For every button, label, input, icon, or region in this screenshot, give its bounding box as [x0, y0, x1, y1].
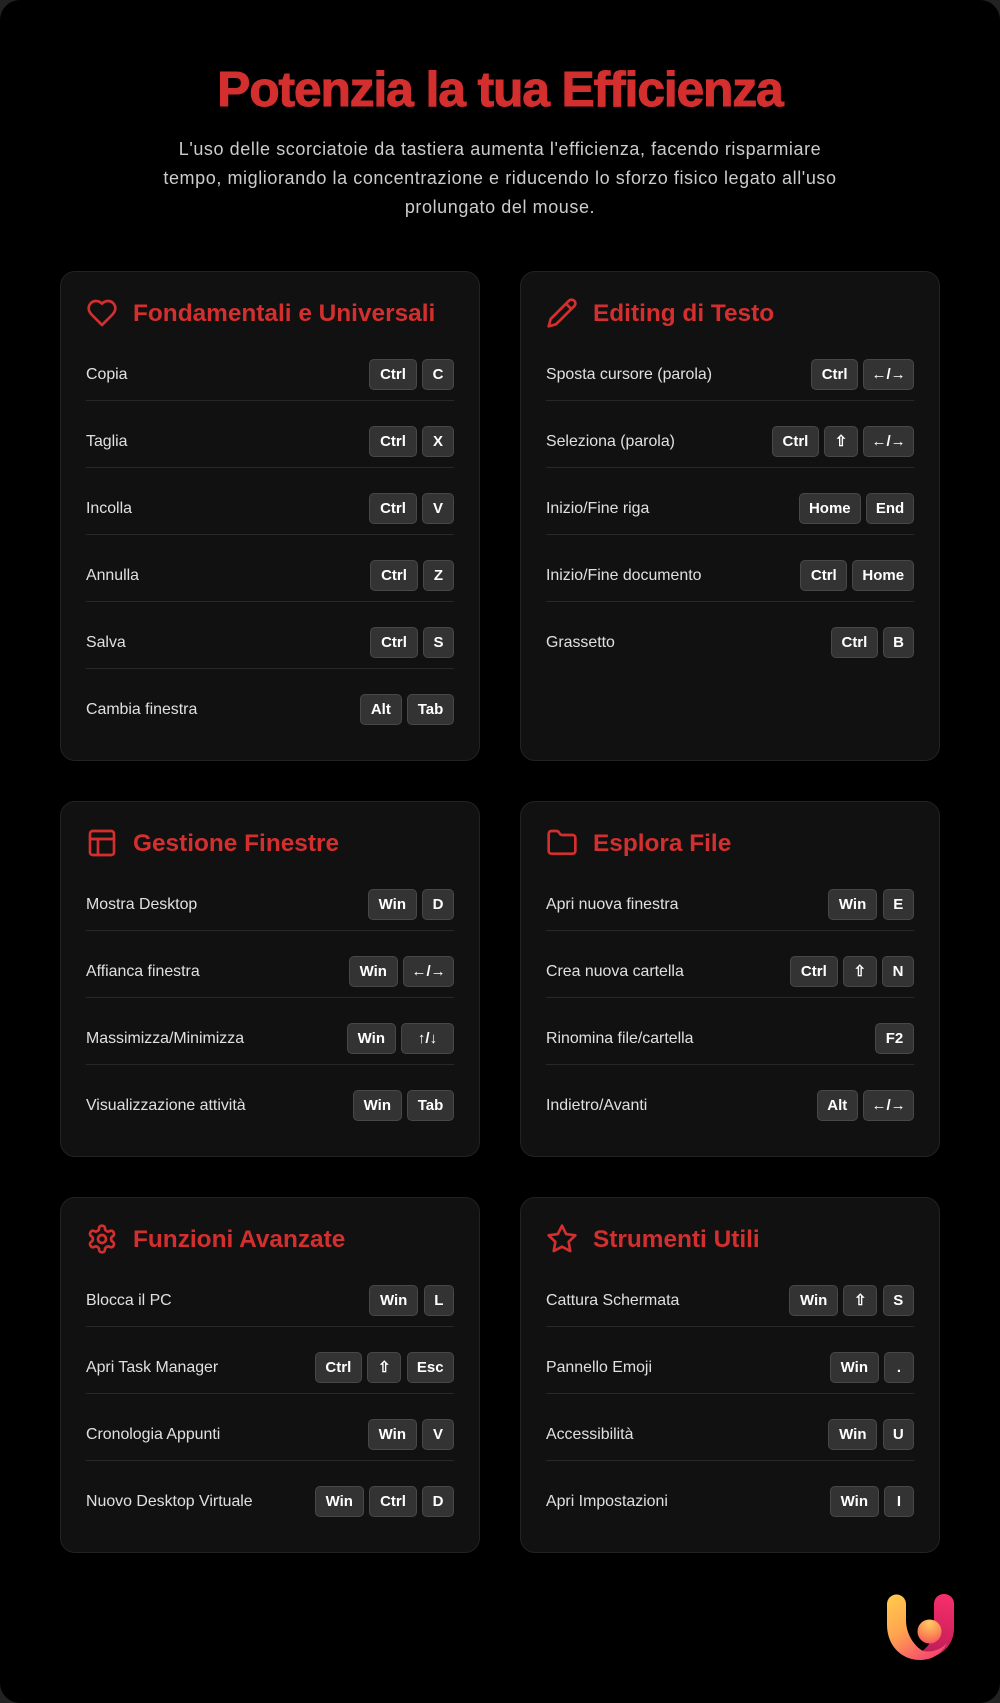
shortcut: Sposta cursore	[546, 359, 914, 401]
shortcut: Cronologia Appunti: Cronologia Appunti	[86, 1426, 220, 1442]
shortcut: Pannello Emoji: .	[897, 1359, 901, 1376]
shortcut: Cambia finestra: Tab	[418, 701, 443, 718]
shortcut: Cattura Schermata: S	[893, 1292, 903, 1309]
shortcut: Massimizza/Minimizza	[86, 1023, 454, 1065]
shortcut: Cattura Schermata: ⇧	[854, 1292, 867, 1309]
shortcut: Apri Task Manager: Apri Task Manager	[86, 1358, 218, 1376]
shortcut: Nuovo Desktop Virtuale: D	[433, 1493, 443, 1510]
shortcut: Nuovo Desktop Virtuale: Ctrl	[380, 1493, 406, 1510]
shortcut: Inizio/Fine documento	[546, 560, 914, 602]
shortcut: Sposta cursore: ←/→	[872, 366, 906, 383]
shortcut: Copia: Copia	[86, 366, 128, 382]
panel heading: Funzioni Avanzate	[133, 1226, 345, 1253]
shortcut: Massimizza/Minimizza: ↑/↓	[418, 1030, 437, 1047]
icon: layout	[88, 830, 116, 856]
shortcut: Accessibilità: Accessibilità	[546, 1426, 633, 1442]
intro paragraph: tempo, migliorando la concentrazione e riducendo lo sforzo fisico legato all'uso	[163, 168, 837, 188]
shortcut: Sposta cursore: Sposta cursore (parola)	[546, 366, 712, 382]
shortcut: Rinomina file/cartella	[546, 1023, 914, 1065]
shortcut: Accessibilità	[546, 1419, 914, 1461]
shortcut: Crea nuova cartella	[546, 956, 914, 998]
shortcut: Annulla	[86, 560, 454, 602]
icon: heart	[87, 300, 117, 326]
icon: star	[547, 1224, 577, 1252]
shortcut: Cronologia Appunti	[86, 1419, 454, 1461]
shortcut: Indietro/Avanti	[546, 1090, 914, 1132]
shortcut: Inizio/Fine riga: End	[876, 500, 904, 517]
shortcut: Sposta cursore: Ctrl	[822, 366, 848, 383]
shortcut: Accessibilità: U	[893, 1426, 904, 1443]
shortcut: Seleziona: ⇧	[835, 433, 847, 450]
shortcut: Inizio/Fine documento: Inizio/Fine documento	[546, 566, 701, 584]
shortcut: Pannello Emoji: Pannello Emoji	[546, 1358, 652, 1376]
shortcut: Visualizzazione attività	[86, 1090, 454, 1132]
panel: Fondamentali e Universali	[60, 271, 480, 761]
shortcut: Apri Task Manager: Ctrl	[325, 1359, 351, 1376]
shortcut: Grassetto	[546, 627, 914, 669]
panel: Editing di Testo	[520, 271, 940, 761]
shortcut: Inizio/Fine documento: Ctrl	[811, 567, 837, 584]
shortcut: Seleziona: Seleziona (parola)	[546, 432, 675, 450]
panel heading: Esplora File	[593, 830, 731, 857]
shortcut: Salva	[86, 627, 454, 669]
shortcut: Rinomina file/cartella: F2	[886, 1030, 903, 1047]
shortcut: Salva: S	[433, 634, 444, 651]
logo ball	[918, 1620, 942, 1644]
shortcut: Annulla: Ctrl	[381, 567, 407, 584]
shortcut: Blocca il PC: Blocca il PC	[86, 1292, 172, 1308]
shortcut: Accessibilità: Win	[839, 1426, 866, 1443]
shortcut: Cronologia Appunti: Win	[379, 1426, 406, 1443]
shortcut: Copia: C	[433, 366, 443, 383]
shortcut: Copia: Ctrl	[380, 366, 406, 383]
shortcut: Taglia	[86, 426, 454, 468]
shortcut: Pannello Emoji	[546, 1352, 914, 1394]
shortcut: Indietro/Avanti: Indietro/Avanti	[546, 1096, 647, 1114]
shortcut: Salva: Salva	[86, 634, 126, 650]
shortcut: Mostra Desktop: D	[433, 896, 443, 913]
shortcut: Nuovo Desktop Virtuale: Nuovo Desktop Virtuale	[86, 1492, 253, 1510]
shortcut: Grassetto: Ctrl	[841, 634, 867, 651]
shortcut: Copia	[86, 359, 454, 401]
shortcut: Cattura Schermata	[546, 1285, 914, 1327]
shortcut: Apri Task Manager: Esc	[417, 1359, 444, 1376]
shortcut: Affianca finestra	[86, 956, 454, 998]
shortcut: Cambia finestra: Cambia finestra	[86, 700, 197, 718]
shortcut: Visualizzazione attività: Visualizzazione attività	[86, 1096, 246, 1114]
shortcut: Affianca finestra: Win	[360, 963, 387, 980]
shortcut: Grassetto: Grassetto	[546, 634, 615, 650]
shortcut: Inizio/Fine riga: Home	[809, 500, 851, 517]
shortcut: Salva: Ctrl	[381, 634, 407, 651]
logo right arm	[922, 1594, 954, 1657]
shortcut: Mostra Desktop	[86, 889, 454, 931]
shortcut: Cambia finestra	[86, 694, 454, 736]
shortcut: Cronologia Appunti: V	[433, 1426, 443, 1443]
panel: Esplora File	[520, 801, 940, 1157]
shortcut: Cattura Schermata: Cattura Schermata	[546, 1292, 679, 1308]
shortcut: Inizio/Fine documento: Home	[862, 567, 904, 584]
shortcut: Blocca il PC: L	[434, 1292, 443, 1309]
panel: Funzioni Avanzate	[60, 1197, 480, 1553]
shortcut: Taglia: Ctrl	[380, 433, 406, 450]
panel heading: Gestione Finestre	[133, 830, 339, 857]
shortcut: Mostra Desktop: Win	[379, 896, 406, 913]
shortcut: Annulla: Annulla	[86, 566, 139, 584]
shortcut: Seleziona: ←/→	[872, 433, 906, 450]
shortcut: Incolla: Ctrl	[380, 500, 406, 517]
shortcut: Apri Impostazioni: Apri Impostazioni	[546, 1492, 668, 1510]
icon: brand logo	[887, 1594, 954, 1660]
shortcut: Incolla: V	[433, 500, 443, 517]
shortcut: Apri Task Manager	[86, 1352, 454, 1394]
shortcut: Inizio/Fine riga: Inizio/Fine riga	[546, 500, 649, 516]
icon: pencil	[547, 298, 577, 328]
panel: Gestione Finestre	[60, 801, 480, 1157]
shortcut: Incolla	[86, 493, 454, 535]
panel: Strumenti Utili	[520, 1197, 940, 1553]
shortcut: Cattura Schermata: Win	[800, 1292, 827, 1309]
shortcut: Crea nuova cartella: Ctrl	[801, 963, 827, 980]
shortcut: Taglia: Taglia	[86, 432, 128, 450]
shortcut: Nuovo Desktop Virtuale: Win	[326, 1493, 353, 1510]
shortcut: Apri nuova finestra: E	[893, 896, 903, 913]
panel heading: Editing di Testo	[593, 300, 774, 327]
shortcut: Apri nuova finestra: Win	[839, 896, 866, 913]
shortcut: Taglia: X	[433, 433, 443, 450]
shortcut: Massimizza/Minimizza: Massimizza/Minimizza	[86, 1030, 244, 1046]
shortcut: Blocca il PC	[86, 1285, 454, 1327]
shortcut: Incolla: Incolla	[86, 500, 132, 516]
shortcut: Visualizzazione attività: Win	[364, 1097, 391, 1114]
shortcut: Visualizzazione attività: Tab	[418, 1097, 443, 1114]
shortcut: Blocca il PC: Win	[380, 1292, 407, 1309]
shortcut: Apri Impostazioni: I	[897, 1493, 901, 1510]
shortcut: Apri nuova finestra	[546, 889, 914, 931]
intro paragraph: prolungato del mouse.	[405, 196, 595, 216]
shortcut: Nuovo Desktop Virtuale	[86, 1486, 454, 1528]
shortcut: Seleziona: Ctrl	[782, 433, 808, 450]
shortcut: Rinomina file/cartella: Rinomina file/cartella	[546, 1030, 694, 1046]
shortcut: Indietro/Avanti: ←/→	[872, 1097, 906, 1114]
shortcut: Affianca finestra: Affianca finestra	[86, 962, 200, 980]
title: Potenzia la tua Efficienza	[217, 62, 783, 117]
shortcut: Crea nuova cartella: ⇧	[854, 963, 866, 980]
shortcut: Affianca finestra: ←/→	[412, 963, 446, 980]
shortcut: Grassetto: B	[893, 634, 904, 651]
logo left ribbon	[887, 1594, 947, 1660]
panel heading: Fondamentali e Universali	[133, 300, 435, 327]
shortcut: Indietro/Avanti: Alt	[827, 1097, 847, 1114]
shortcut: Apri Impostazioni: Win	[841, 1493, 868, 1510]
shortcut: Apri Impostazioni	[546, 1486, 914, 1528]
shortcut: Inizio/Fine riga	[546, 493, 914, 535]
icon: gear	[88, 1224, 116, 1254]
shortcut: Apri Task Manager: ⇧	[378, 1359, 391, 1376]
shortcut: Cambia finestra: Alt	[371, 701, 391, 718]
panel heading: Strumenti Utili	[593, 1226, 760, 1253]
shortcut: Crea nuova cartella: N	[893, 963, 903, 980]
shortcut: Apri nuova finestra: Apri nuova finestra	[546, 896, 678, 912]
intro paragraph	[163, 138, 837, 217]
intro paragraph: L'uso delle scorciatoie da tastiera aumenta l'efficienza, facendo risparmiare	[179, 138, 821, 158]
icon: folder	[547, 830, 577, 855]
shortcut: Crea nuova cartella: Crea nuova cartella	[546, 962, 684, 980]
shortcut: Annulla: Z	[434, 567, 443, 584]
shortcut: Mostra Desktop: Mostra Desktop	[86, 896, 197, 912]
shortcut: Seleziona	[546, 426, 914, 468]
shortcut: Pannello Emoji: Win	[841, 1359, 868, 1376]
shortcut: Massimizza/Minimizza: Win	[358, 1030, 385, 1047]
